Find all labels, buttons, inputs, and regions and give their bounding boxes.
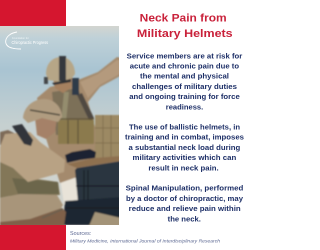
upper soldier face	[53, 78, 72, 93]
lower soldier face	[35, 118, 57, 139]
upper helmet	[46, 57, 75, 82]
red block: bottom	[0, 225, 66, 250]
rim under glove	[67, 156, 121, 168]
sources: Sources:	[70, 231, 91, 237]
logo: Foundation for Chiropractic Progress: Chiropractic Progress	[12, 40, 49, 45]
lower soldier strap	[12, 124, 33, 146]
sources	[70, 231, 220, 244]
rubble on the horizon	[0, 130, 16, 145]
black equipment case	[75, 161, 121, 202]
text block: risk of pain: acute and chronic pain due to	[130, 62, 239, 70]
lower soldier legs	[0, 194, 63, 222]
text block: helmet load: training and in combat, imposes	[125, 133, 244, 142]
text block: helmet load: a substantial neck load during	[129, 143, 241, 152]
text block: risk of pain: challenges of military duties	[132, 82, 237, 91]
tan pack at right	[95, 115, 121, 161]
bright gap behind soldiers	[60, 178, 80, 204]
lower helmet	[23, 99, 62, 123]
lower soldier arm and shoulder	[0, 132, 65, 182]
text block: helmet load	[125, 122, 244, 172]
ammo pouches	[58, 120, 94, 144]
upper soldier torso and arm	[37, 57, 122, 183]
glove	[65, 149, 96, 163]
text block: risk of pain: readiness.	[166, 102, 203, 111]
logo: Foundation for Chiropractic Progress: Foundation for	[12, 36, 29, 40]
text block: spinal manipulation: by a doctor of chiropractic, may	[126, 194, 244, 203]
text block: helmet load: military activities which can	[133, 153, 237, 162]
red block: top	[0, 0, 66, 26]
text block: risk of pain	[127, 51, 242, 111]
logo: Foundation for Chiropractic Progress	[6, 32, 49, 49]
text block: risk of pain: the mental and physical	[140, 72, 229, 81]
text block: risk of pain: and ongoing training for force	[129, 92, 240, 101]
text block: spinal manipulation: the neck.	[168, 214, 201, 223]
text block: risk of pain: Service members are at risk for	[127, 51, 242, 60]
sources: Military Medicine, International Journal of Interdisciplinary Research	[70, 238, 220, 244]
title: Neck Pain from	[140, 13, 227, 25]
photo: soldiers with ballistic helmets	[0, 26, 122, 226]
text block: spinal manipulation: Spinal Manipulation, performed	[126, 184, 244, 193]
text block: helmet load: result in neck pain.	[148, 163, 219, 172]
lower soldier vest	[0, 160, 60, 198]
text block: helmet load: The use of ballistic helmets, in	[129, 122, 240, 132]
text block: spinal manipulation: reduce and relieve pain within	[129, 204, 241, 213]
ground	[0, 208, 66, 226]
title: Military Helmets	[137, 28, 233, 40]
title	[137, 13, 233, 40]
text block: spinal manipulation	[126, 184, 244, 223]
